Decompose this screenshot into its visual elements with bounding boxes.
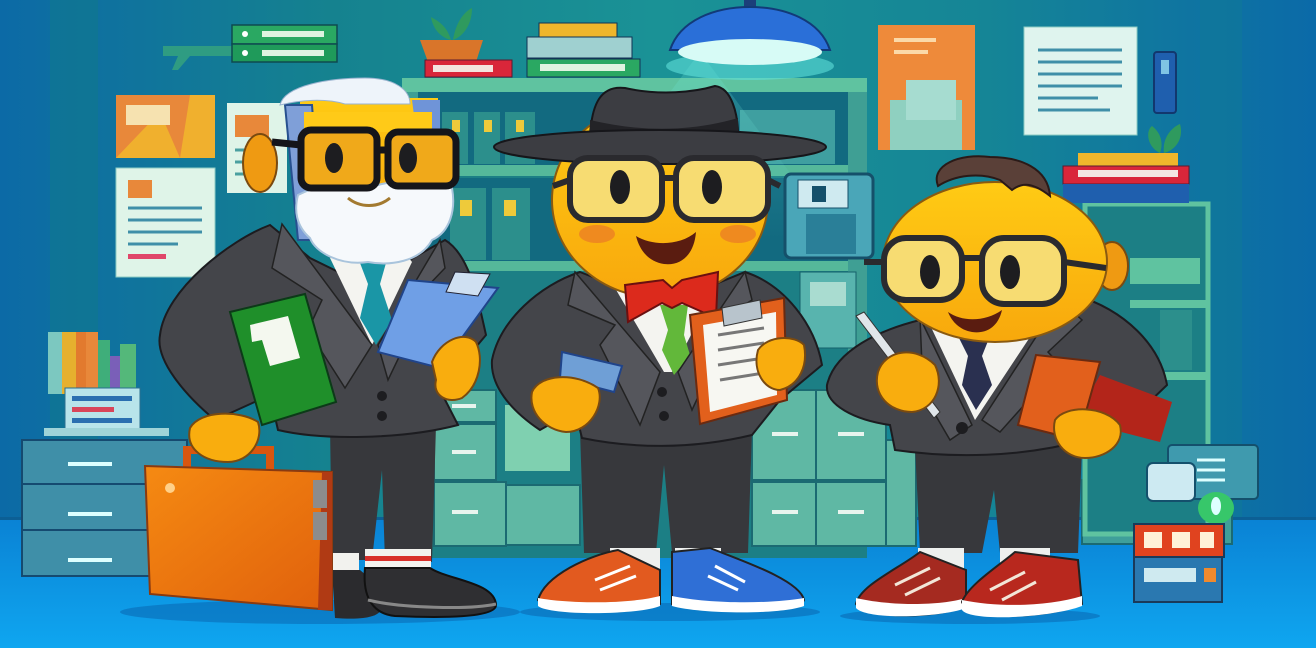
- right shelf unit: [1085, 204, 1208, 534]
- jacket button: [956, 422, 968, 434]
- hair: [937, 156, 1050, 196]
- ear: [243, 134, 277, 192]
- trousers: [915, 445, 1082, 553]
- shirt and dark tie: [930, 322, 1040, 420]
- book hand: [1054, 409, 1121, 458]
- blush and smile: [579, 225, 756, 264]
- shirt and teal tie: [330, 240, 412, 345]
- floor shadows: [120, 600, 1100, 624]
- socks: [333, 549, 431, 573]
- jacket buttons: [377, 391, 387, 421]
- shoes: [856, 552, 1082, 617]
- lapels: [915, 300, 1082, 440]
- smile: [948, 310, 1002, 332]
- trousers: [330, 425, 436, 562]
- orange book: [1018, 355, 1172, 442]
- blue id card: [560, 352, 622, 392]
- shoes: [332, 568, 496, 619]
- head: [883, 182, 1107, 342]
- wall shelf with green binders: [163, 25, 337, 70]
- left wall paper narrow: [227, 103, 287, 193]
- jacket: [827, 295, 1167, 455]
- glasses: [301, 130, 456, 188]
- jacket: [159, 225, 486, 437]
- hand on clipboard: [432, 337, 480, 400]
- orange clipboard with checklist: [690, 298, 787, 424]
- chat bubbles: [1147, 445, 1258, 524]
- potted plant on red book: [420, 8, 512, 77]
- character: left older man with beard: [145, 78, 498, 619]
- green binder: [230, 294, 336, 425]
- character: middle man with hat and bow tie: [492, 86, 826, 613]
- lapels: [272, 224, 445, 388]
- red bow tie: [625, 272, 718, 322]
- paper document on wall: [1024, 27, 1137, 135]
- lapels: [568, 272, 752, 425]
- small device on shelf: [800, 272, 856, 348]
- pen hand: [877, 352, 939, 412]
- pen: [856, 312, 940, 418]
- glasses and eyes: [553, 158, 780, 220]
- beard: [296, 181, 453, 263]
- box with labels: [44, 388, 169, 436]
- orange poster: [878, 25, 975, 150]
- left hand: [531, 377, 600, 432]
- character: right man with pen and orange book: [827, 156, 1172, 617]
- row of books lower left: [48, 332, 136, 394]
- usb device on wall: [1154, 52, 1176, 113]
- book stack lower right: [1134, 524, 1224, 602]
- socks: [918, 548, 1050, 572]
- white hair: [280, 78, 410, 105]
- floppy disk on shelf: [785, 174, 873, 258]
- blue clipboard: [378, 272, 498, 368]
- head: [552, 102, 768, 298]
- ear: [1096, 242, 1128, 290]
- glasses and eyes: [864, 238, 1106, 304]
- left wall poster orange: [116, 95, 215, 158]
- filing cabinets below the shelf: [434, 390, 1232, 546]
- hand on briefcase: [189, 414, 259, 462]
- jacket: [492, 272, 822, 446]
- orange briefcase: [145, 450, 332, 610]
- right hand: [757, 338, 805, 390]
- books and plant on right shelf: [1063, 124, 1189, 203]
- left wall paper document: [116, 168, 215, 277]
- shoes: [538, 548, 804, 613]
- head with glasses and beard: [243, 78, 456, 263]
- hat: [494, 86, 826, 164]
- big shelving unit: [402, 78, 867, 558]
- trousers: [580, 430, 752, 553]
- shirt and green tie: [615, 288, 715, 375]
- jacket buttons: [657, 387, 669, 421]
- filing cabinet handles: [452, 404, 864, 514]
- stack of books on top of shelf: [527, 23, 640, 77]
- left filing cabinet: [22, 440, 187, 576]
- socks: [610, 548, 721, 572]
- ceiling lamp: [560, 0, 840, 240]
